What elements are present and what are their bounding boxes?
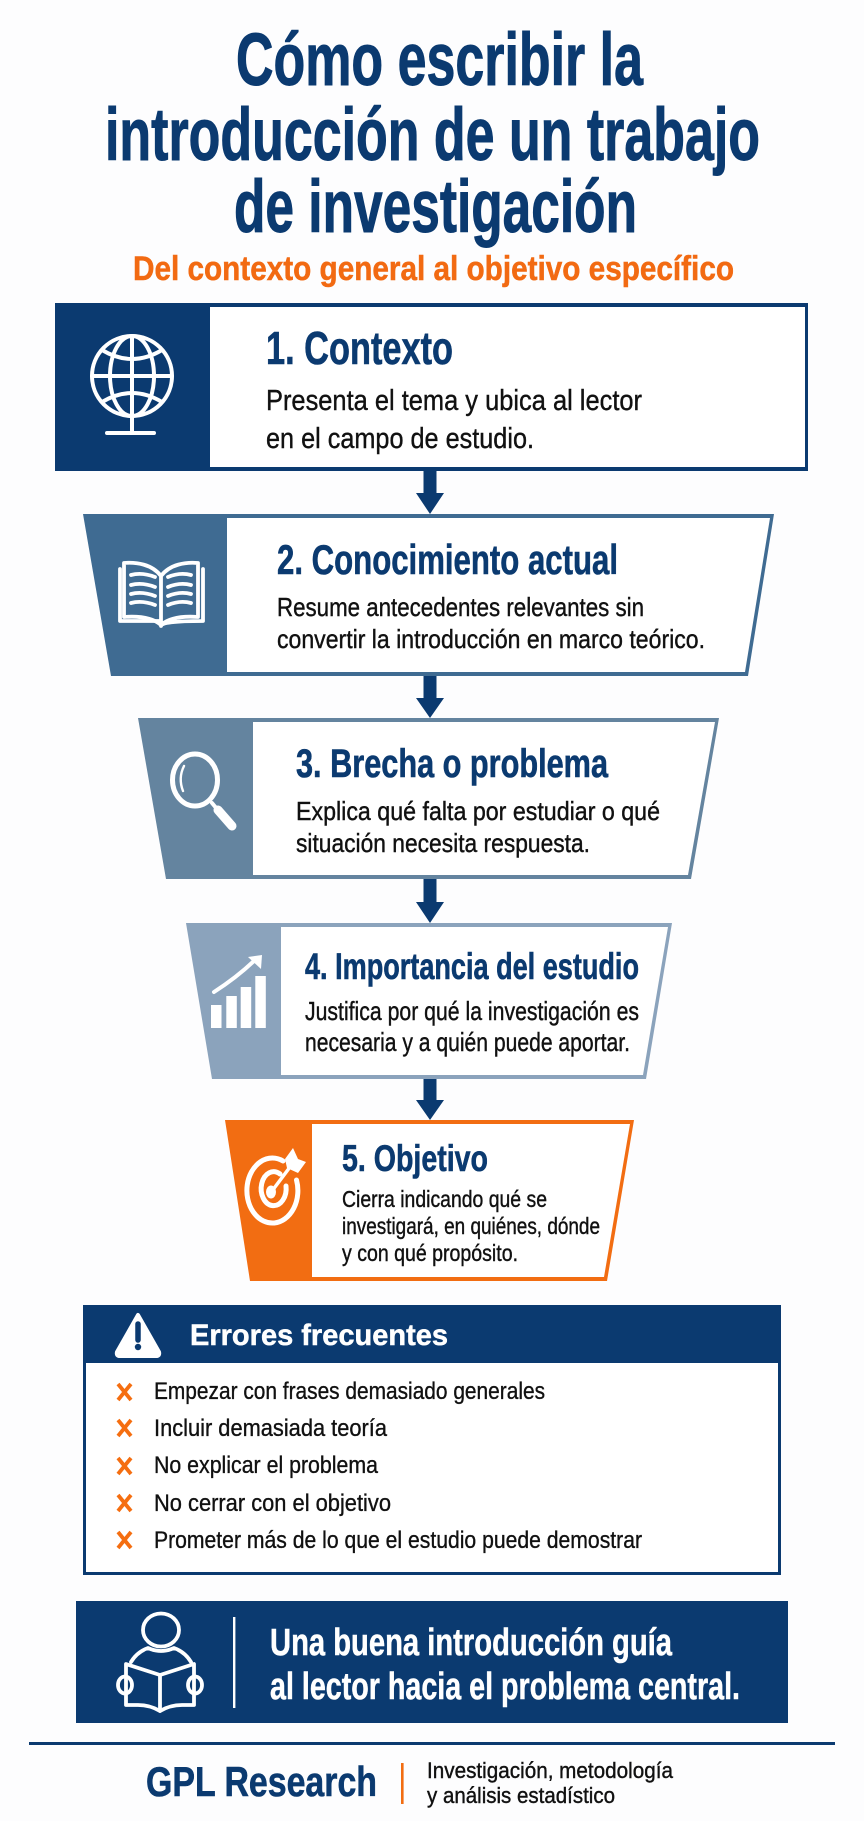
heading: 1. Contexto xyxy=(266,322,453,374)
body text: Justifica por qué la investigación es xyxy=(305,996,639,1026)
banner text xyxy=(270,1622,740,1708)
heading: 3. Brecha o problema xyxy=(296,742,609,786)
panel: step 3 brecha o problema xyxy=(138,718,719,879)
arrow 1 xyxy=(416,471,444,514)
body text xyxy=(296,796,660,858)
body text xyxy=(342,1186,600,1266)
body text: en el campo de estudio. xyxy=(266,423,534,455)
icon: magnifier xyxy=(172,754,232,826)
icon: growth chart xyxy=(211,955,266,1028)
panel: step 4 importancia del estudio xyxy=(186,923,672,1079)
body text: Presenta el tema y ubica al lector xyxy=(266,385,642,417)
arrow 4 xyxy=(416,1079,444,1120)
heading: 2. Conocimiento actual xyxy=(277,536,618,583)
body text: Explica qué falta por estudiar o qué xyxy=(296,796,660,826)
panel: step 5 objetivo xyxy=(225,1120,634,1281)
list item 5: Prometer más de lo que el estudio puede demostrar xyxy=(154,1527,642,1554)
banner: takeaway xyxy=(76,1601,788,1723)
list item 1: Empezar con frases demasiado generales xyxy=(154,1378,545,1405)
panel: errores frecuentes xyxy=(83,1305,781,1575)
orange divider xyxy=(401,1763,404,1804)
subtitle: Del contexto general al objetivo específico xyxy=(133,250,734,288)
body text: situación necesita respuesta. xyxy=(296,828,590,858)
title xyxy=(105,18,760,248)
heading: 4. Importancia del estudio xyxy=(305,946,639,987)
divider line xyxy=(233,1617,235,1708)
icon: person reading xyxy=(118,1614,202,1711)
list item 3: No explicar el problema xyxy=(154,1452,379,1479)
icon: target with arrow xyxy=(247,1148,306,1223)
list item 4: No cerrar con el objetivo xyxy=(154,1490,391,1517)
footer xyxy=(29,1742,835,1808)
banner text: Una buena introducción guía xyxy=(270,1622,673,1664)
tagline xyxy=(427,1758,674,1808)
body text xyxy=(277,592,705,654)
panel: step 2 conocimiento actual xyxy=(83,514,774,676)
tagline: Investigación, metodología xyxy=(427,1758,674,1783)
icon: globe xyxy=(92,336,172,433)
panel: step 1 contexto xyxy=(55,303,808,471)
heading: 5. Objetivo xyxy=(342,1138,488,1179)
body text: investigará, en quiénes, dónde xyxy=(342,1213,600,1239)
body text: necesaria y a quién puede aportar. xyxy=(305,1027,630,1057)
title: de investigación xyxy=(234,165,637,248)
body text: y con qué propósito. xyxy=(342,1240,518,1266)
icon: warning triangle xyxy=(117,1315,159,1356)
title: Cómo escribir la xyxy=(236,18,644,101)
heading: Errores frecuentes xyxy=(190,1319,448,1352)
arrow 3 xyxy=(416,879,444,923)
icon: open book xyxy=(120,563,203,626)
body text: Resume antecedentes relevantes sin xyxy=(277,592,644,622)
body text: Cierra indicando qué se xyxy=(342,1186,547,1212)
tagline: y análisis estadístico xyxy=(427,1783,615,1808)
brand name: GPL Research xyxy=(146,1758,377,1805)
body text: convertir la introducción en marco teórico. xyxy=(277,624,705,654)
body text xyxy=(266,385,642,455)
arrow 2 xyxy=(416,676,444,718)
list item 2: Incluir demasiada teoría xyxy=(154,1415,388,1442)
body text xyxy=(305,996,639,1057)
